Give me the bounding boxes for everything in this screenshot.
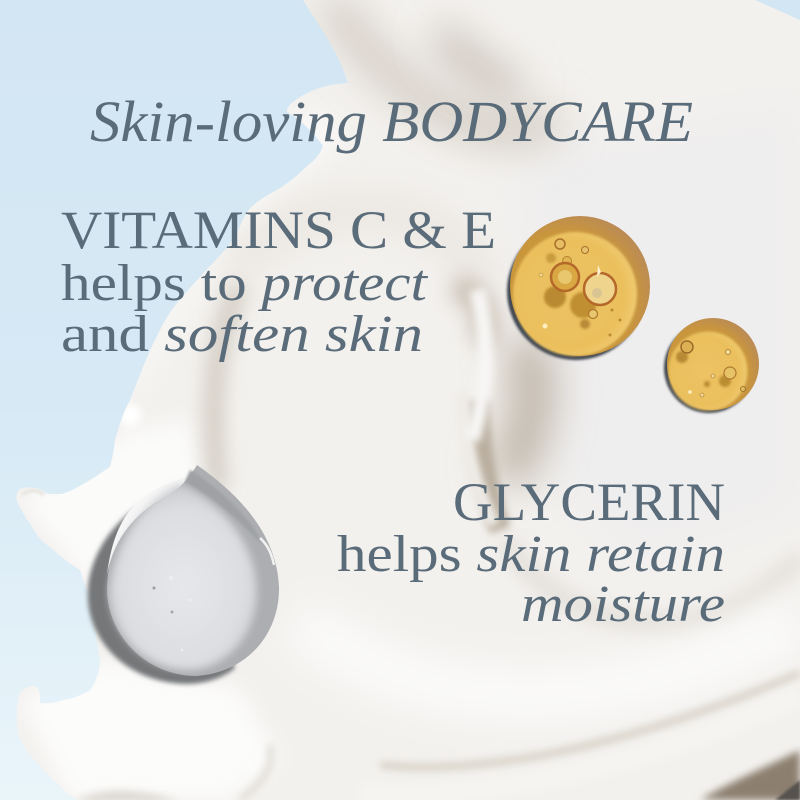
text block: vitamins C and E	[61, 200, 496, 363]
text block: vitamins C and E: VITAMINS C & E	[61, 200, 496, 260]
text block: vitamins C and E: helps to protect	[61, 255, 429, 312]
text block: glycerin: moisture	[521, 576, 725, 633]
icon: clear glycerin gel droplet	[88, 465, 279, 684]
text block: vitamins C and E: and soften skin	[61, 306, 423, 363]
text block: glycerin	[337, 472, 725, 633]
icon: small amber oil droplet	[664, 318, 759, 413]
title: Skin-loving BODYCARE	[90, 89, 693, 154]
icon: large amber oil droplet	[507, 216, 650, 360]
text block: glycerin: GLYCERIN	[453, 472, 725, 532]
text block: glycerin: helps skin retain	[337, 526, 725, 583]
